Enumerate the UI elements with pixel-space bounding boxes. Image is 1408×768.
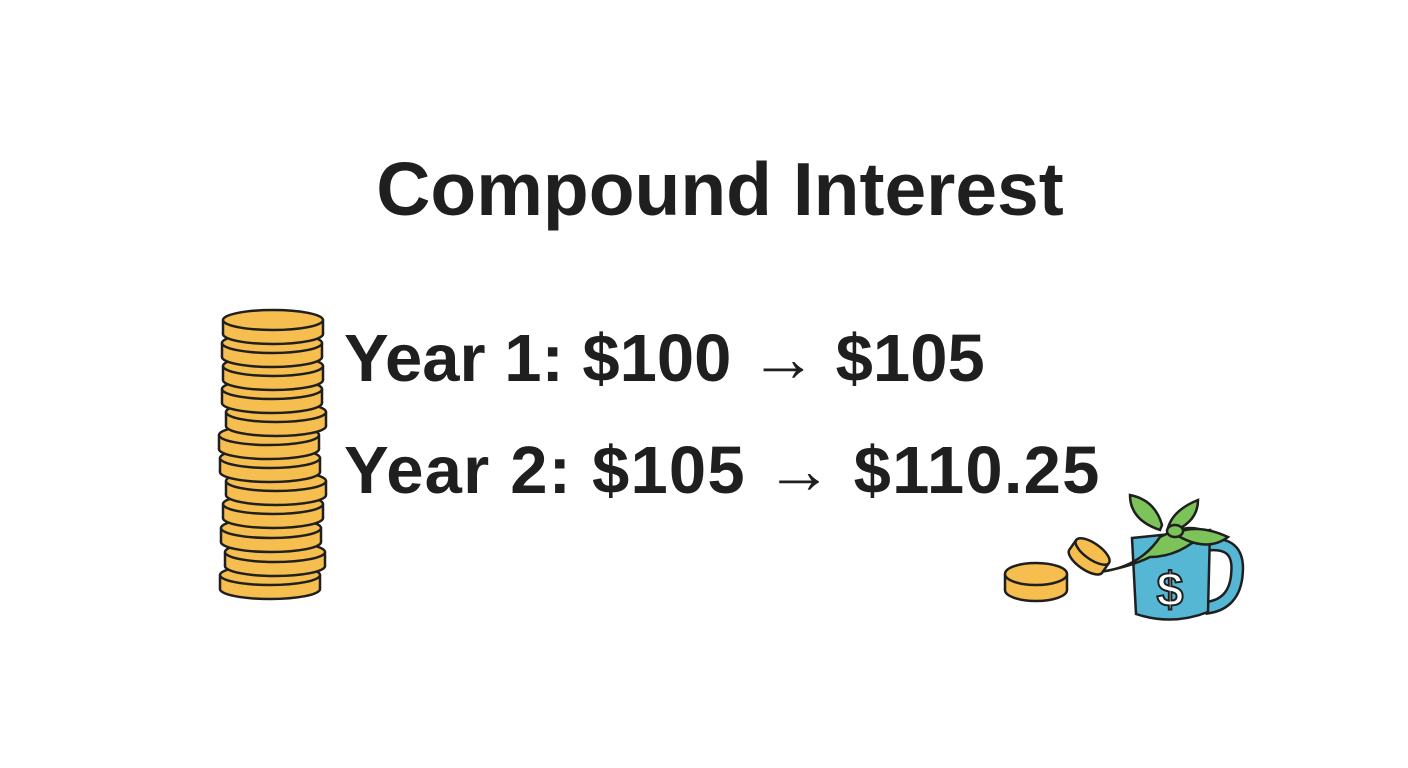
icon: coins and money mug plant: $ bbox=[1157, 564, 1184, 617]
text: year 2: Year 2: $105 → $110.25 bbox=[344, 433, 1101, 508]
text: year 1: Year 1: $100 → $105 bbox=[344, 321, 985, 396]
title: Compound Interest bbox=[376, 147, 1064, 231]
